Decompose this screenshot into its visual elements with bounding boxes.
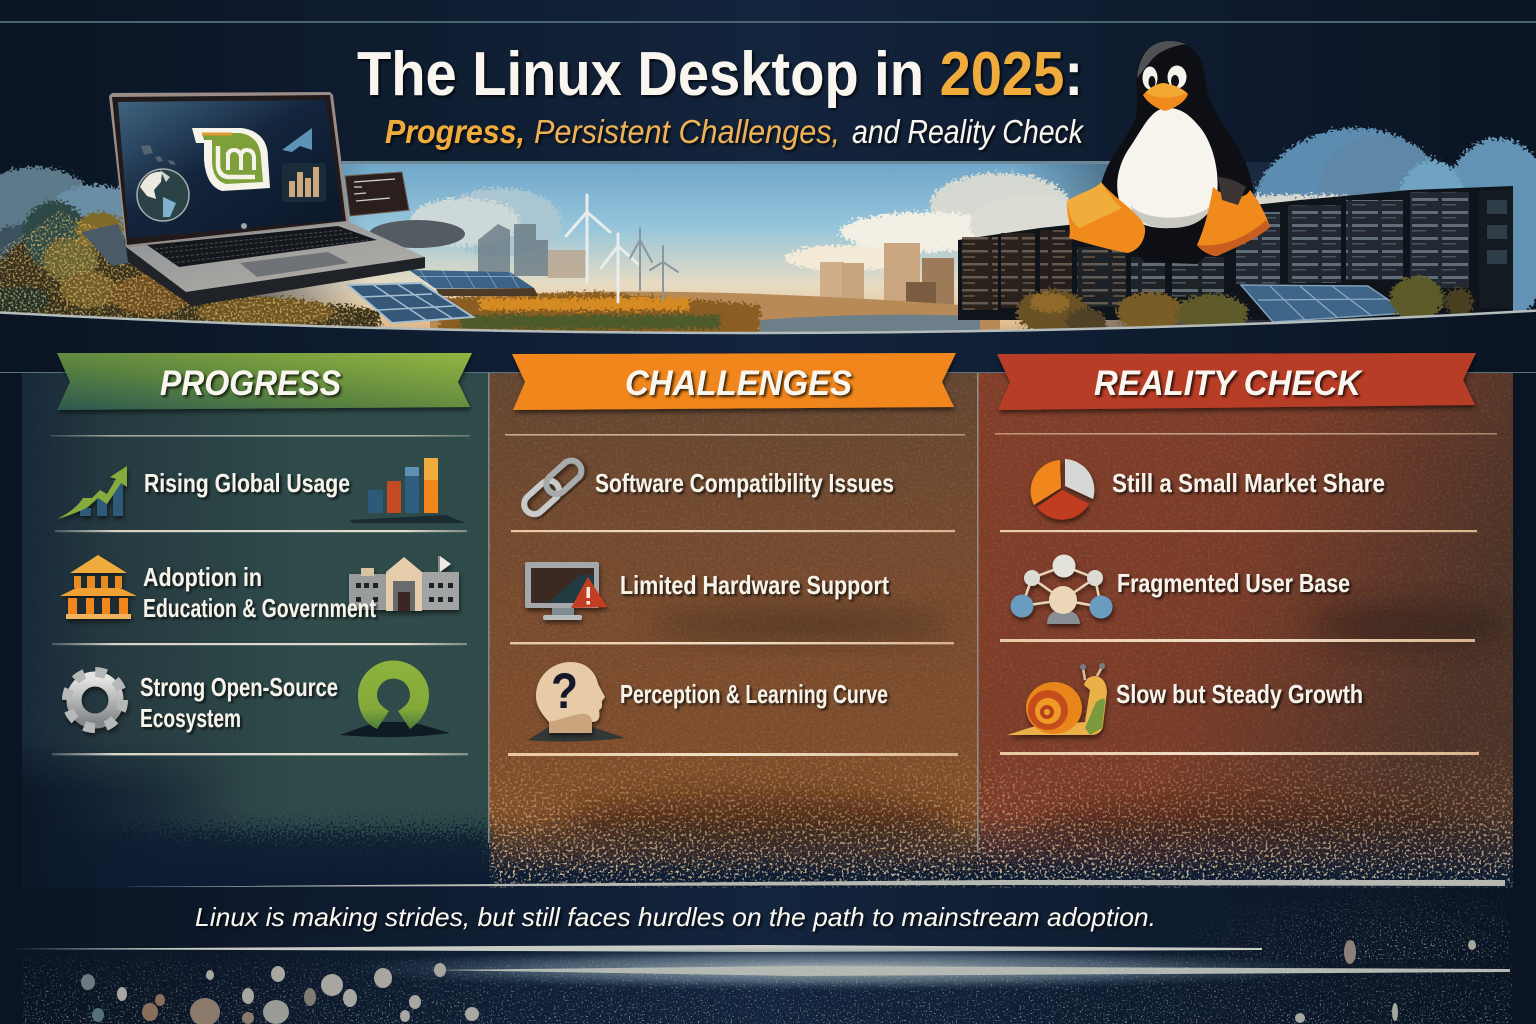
panel: reality check	[978, 373, 1513, 873]
penguin left foot	[1067, 182, 1145, 253]
tablet behind laptop	[81, 224, 132, 266]
title: The Linux Desktop in 2025:	[357, 40, 1083, 109]
subtitle: and Reality Check	[852, 113, 1084, 150]
trackpad	[240, 252, 349, 277]
text: Ecosystem	[140, 703, 241, 733]
icon: chain link	[520, 456, 585, 518]
icon: government building	[60, 555, 137, 619]
field: orange flowers	[440, 292, 760, 340]
city: small left	[478, 224, 588, 278]
screen chart tile	[282, 163, 326, 202]
row: still a small market share	[1031, 459, 1385, 520]
text: Fragmented User Base	[1117, 568, 1350, 598]
ribbon: reality check	[997, 353, 1476, 410]
ribbon: challenges	[512, 353, 956, 410]
city: right skyline	[820, 243, 954, 310]
header rule	[340, 161, 1130, 164]
icon: gear	[67, 672, 123, 728]
penguin right foot	[1197, 187, 1270, 256]
icon: pie chart	[1031, 459, 1094, 520]
footer band	[0, 880, 1536, 1024]
icon: monitor with warning	[525, 562, 607, 620]
footer tagline: Linux is making strides, but still faces hurdles on the path to mainstream adoption.	[195, 902, 1156, 932]
solar panel: front	[348, 283, 473, 323]
icon: rising arrow	[57, 466, 127, 519]
text: Still a Small Market Share	[1112, 468, 1385, 498]
bushes	[1016, 276, 1473, 336]
globe	[137, 169, 189, 221]
scattered gravel	[22, 880, 1512, 1024]
dark disc device	[369, 220, 465, 248]
text: Education & Government	[143, 593, 376, 623]
penguin body	[1100, 41, 1255, 264]
panel: progress	[22, 373, 488, 873]
keyboard	[147, 226, 377, 267]
laptop base	[126, 222, 425, 292]
server racks	[958, 186, 1513, 320]
text: Perception & Learning Curve	[620, 679, 888, 709]
sky	[182, 162, 1276, 330]
ribbon: reality check: REALITY CHECK	[1094, 364, 1364, 403]
penguin mascot	[1067, 41, 1270, 264]
laptop	[81, 92, 465, 306]
text: Strong Open-Source	[140, 672, 338, 702]
text: Software Compatibility Issues	[595, 468, 894, 498]
clouds: dark left	[0, 167, 143, 278]
penguin flipper	[1218, 177, 1246, 205]
clouds: large right	[1247, 128, 1536, 332]
ribbon: progress	[57, 353, 472, 410]
row: slow but steady growth	[1007, 663, 1363, 735]
solar panel: right	[1241, 285, 1408, 322]
row: fragmented user base	[1010, 554, 1350, 624]
foliage: left hill	[0, 201, 380, 345]
triangle graphic	[282, 128, 312, 152]
penguin beak	[1143, 83, 1188, 111]
Linux Mint logo	[192, 128, 270, 191]
arc band under hero	[0, 310, 1536, 380]
panel: challenges	[489, 373, 977, 873]
ground strip	[430, 292, 1000, 332]
subtitle: Progress,	[385, 113, 525, 150]
penguin eyes	[1142, 66, 1186, 90]
icon: snail	[1007, 663, 1107, 735]
text: Slow but Steady Growth	[1116, 679, 1363, 709]
row: rising global usage	[57, 458, 466, 523]
text: Limited Hardware Support	[620, 570, 889, 600]
solar panel: back	[409, 270, 534, 289]
row: limited hardware support	[525, 562, 889, 620]
icon: open source logo	[340, 661, 450, 737]
subtitle	[385, 113, 1084, 150]
penguin belly	[1117, 108, 1218, 228]
laptop lid	[109, 92, 349, 247]
row: software compatibility issues	[520, 456, 894, 518]
app icons	[141, 145, 176, 165]
text: Adoption in	[143, 562, 262, 592]
terminal window	[345, 172, 409, 216]
icon: user network	[1010, 554, 1112, 624]
ribbon: challenges: CHALLENGES	[625, 364, 852, 403]
hero illustration	[0, 92, 1536, 352]
laptop screen	[118, 100, 342, 238]
ribbon: progress: PROGRESS	[160, 364, 341, 403]
row: perception and learning curve	[528, 662, 888, 742]
subtitle: Persistent Challenges,	[534, 113, 840, 150]
webcam dot	[241, 223, 247, 229]
row: adoption in education and government	[60, 555, 459, 623]
text: Rising Global Usage	[144, 468, 350, 498]
icon: bar chart	[350, 458, 466, 523]
row: strong open-source ecosystem	[67, 661, 450, 737]
panel bottom dissolve	[0, 815, 1536, 914]
icon: school	[349, 556, 459, 611]
clouds: centre	[410, 173, 1090, 271]
panel texture	[22, 373, 1513, 873]
icon: head with question mark: ?	[551, 663, 578, 719]
icon: head with question mark	[528, 662, 625, 742]
reflective road streak	[340, 947, 1510, 991]
wind turbines	[566, 195, 678, 302]
